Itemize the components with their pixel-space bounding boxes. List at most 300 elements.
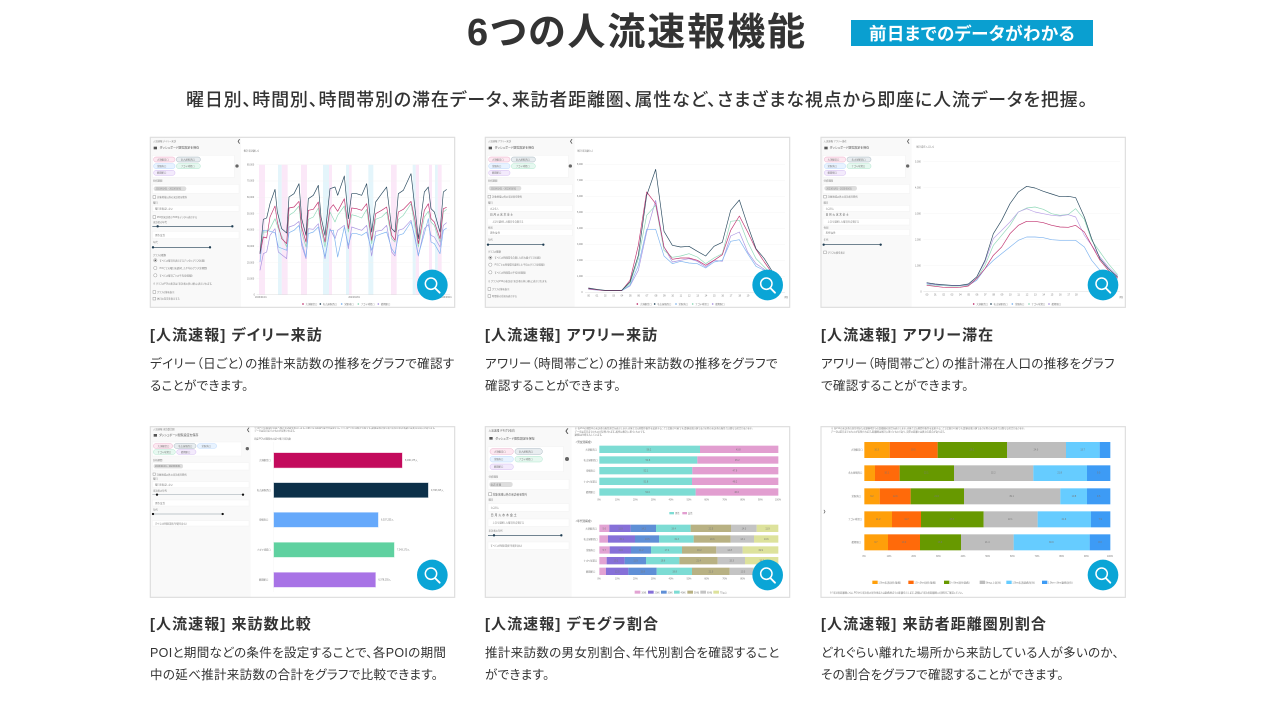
description: hourly visits xyxy=(485,357,778,393)
chart: gender stacked bars: 70% xyxy=(722,500,727,502)
chart: hourly visits line chart: 5,000 xyxy=(577,212,584,214)
chart: hourly visits line chart: 6,000 xyxy=(577,196,584,198)
sidebar: filter settings: 栄駅南口 xyxy=(202,444,212,448)
icon: magnifier xyxy=(1088,270,1118,300)
chart: hourly stay line chart: 17 xyxy=(1067,295,1071,297)
heading: hourly visits: [人流速報] アワリー来訪 xyxy=(485,327,658,344)
chart: age stacked bars: 10.1 xyxy=(614,561,619,563)
description: demographics: ができます。 xyxy=(485,668,550,682)
chart: age stacked bars: 15.3 xyxy=(729,561,735,563)
sidebar: filter settings: ❮ xyxy=(906,138,910,144)
description: visit comparison xyxy=(150,646,446,682)
chart: hourly visits line chart: 07 xyxy=(646,295,649,297)
chart: age stacked bars: 19.2 xyxy=(697,550,702,552)
sidebar: filter settings: ※ グラフのPOIの表記は「来訪者の多い順」に表示されます。 xyxy=(153,282,212,286)
chart: hourly visits line chart: 19 xyxy=(747,295,750,297)
sidebar: filter settings: 大須観音口 xyxy=(492,157,504,161)
chart: gender stacked bars: 80% xyxy=(740,500,745,502)
chart: hourly stay line chart: 01 xyxy=(934,295,937,297)
chart: horizontal bar comparison: ナゴヤ球場口 xyxy=(257,548,271,552)
chart: gender stacked bars: <男女別構成> xyxy=(576,440,592,444)
chart: hourly visits line chart: 4,000 xyxy=(577,228,584,230)
chart: hourly stay line chart: 5,000 xyxy=(915,161,922,163)
chart: horizontal bar comparison xyxy=(254,426,444,592)
chart: distance stacked bars: 60% xyxy=(1010,556,1015,558)
sidebar: filter settings: 人流速報 アワリー来訪 xyxy=(488,139,512,143)
chart: gender stacked bars: 男性 xyxy=(675,511,680,515)
chart: gender stacked bars: 10% xyxy=(615,500,620,502)
sidebar: filter settings: POIごとの曜日を選択した平均のグラフ(全期間) xyxy=(160,266,207,270)
chart: hourly stay line chart: 大須観音口 xyxy=(976,302,989,306)
sidebar: filter settings: 人流速報 デモグラ割合 xyxy=(489,429,515,433)
chart: gender stacked bars: 56.2 xyxy=(647,449,652,451)
chart: hourly stay line chart: 13 xyxy=(1034,295,1037,297)
sidebar: filter settings: 2023/01/01 - 2023/03/31 xyxy=(155,466,181,468)
chart: hourly stay line chart: 推計滞在人口(人) xyxy=(916,145,934,149)
heading: hourly stay: [人流速報] アワリー滞在 xyxy=(821,327,994,344)
panel: daily visits screenshot xyxy=(150,136,456,308)
sidebar: filter settings: ❮ xyxy=(565,429,569,435)
chart: hourly stay line chart: 栄駅南口 xyxy=(1015,302,1025,306)
chart: distance stacked bars: 39.1 xyxy=(1009,496,1015,498)
chart: gender stacked bars: 51.8 xyxy=(644,481,649,483)
sidebar: filter settings xyxy=(151,138,241,307)
sidebar: filter settings: 年代 xyxy=(153,507,158,511)
chart: horizontal bar comparison: 8,036,175人 xyxy=(405,459,418,462)
chart: distance stacked bars: 9.7 xyxy=(874,542,878,544)
chart: hourly visits line chart: 栄駅南口 xyxy=(679,302,689,306)
chart: daily line chart: ナゴヤ球場口 xyxy=(361,302,375,306)
badge: data through previous day xyxy=(851,20,1093,46)
chart: distance stacked bars: 1.5km〜3km(勤務/居住) xyxy=(1048,580,1073,584)
sidebar: filter settings: ナゴヤ球場口 xyxy=(516,164,530,168)
chart: age stacked bars: 18.6 xyxy=(661,561,666,563)
chart: hourly visits line chart: 0 xyxy=(581,292,583,294)
icon: magnifier xyxy=(417,560,448,590)
sidebar: filter settings: 鶴舞駅口 xyxy=(492,171,502,175)
chart: distance stacked bars: 28.2 xyxy=(970,450,975,452)
chart: hourly stay line chart: 3,000 xyxy=(915,213,922,215)
sidebar: filter settings: 名古屋駅西口 xyxy=(852,157,866,161)
chart: age stacked bars: 11.9 xyxy=(618,550,623,552)
chart: age stacked bars: 5.6 xyxy=(603,528,607,530)
description: hourly stay: アワリー（時間帯ごと）の推計滞在人口の推移をグラフ xyxy=(821,357,1115,371)
chart: age stacked bars: 13.3 xyxy=(741,571,746,573)
sidebar: filter settings: 鶴舞駅口 xyxy=(828,171,838,175)
chart: distance stacked bars: 9.5 xyxy=(1097,473,1101,475)
chart: horizontal bar comparison: 6,537,255人 xyxy=(381,519,394,522)
chart: age stacked bars: 20% xyxy=(633,578,638,580)
sidebar: filter settings: 鶴舞駅口 xyxy=(181,450,191,454)
chart: age stacked bars: 鶴舞駅口 xyxy=(586,569,596,573)
chart: hourly visits line chart: 鶴舞駅口 xyxy=(715,302,725,306)
chart: hourly stay line chart: 0 xyxy=(920,291,922,293)
sidebar: filter settings: 人流速報 来訪数比較 xyxy=(153,427,175,431)
sidebar: filter settings: グラフの値を表示 xyxy=(157,290,175,294)
chart: age stacked bars: 21.4 xyxy=(696,561,702,563)
chart: age stacked bars: 19.9 xyxy=(758,550,764,552)
sidebar: filter settings: ❮ xyxy=(246,427,250,433)
chart: hourly visits line chart: 推計来訪数(人) xyxy=(577,148,593,152)
chart: age stacked bars: 11.9 xyxy=(633,561,638,563)
chart: age stacked bars: 19.4 xyxy=(671,528,677,530)
sidebar: filter settings: 男性/女性 xyxy=(490,230,501,234)
sidebar: filter settings: ダッシュボード閲覧設定を保存 xyxy=(495,435,535,440)
chart: daily line chart: 40,000 xyxy=(247,230,255,232)
chart: distance stacked bars: 70% xyxy=(1035,556,1039,558)
chart: distance stacked bars: 9.5 xyxy=(1097,496,1101,498)
chart: distance stacked bars: 0% xyxy=(862,556,866,558)
chart: gender stacked bars: 30% xyxy=(651,500,656,502)
sidebar: filter settings: 栄駅南口 xyxy=(828,164,838,168)
sidebar: filter settings: ※ グラフのPOIの表記は「来訪者の多い順」に表示されます。 xyxy=(488,279,547,283)
panel: visitor distance screenshot xyxy=(820,426,1126,598)
chart: daily line chart: 2023/02/01 xyxy=(348,297,361,299)
chart: age stacked bars: 10% xyxy=(615,578,620,580)
chart: distance stacked bars: 22.1 xyxy=(1008,519,1013,521)
icon: magnifier xyxy=(752,270,783,300)
description: daily visits: デイリー（日ごと）の推計来訪数の推移をグラフで確認す xyxy=(150,357,454,371)
chart: hourly stay line chart: 1,000 xyxy=(915,265,922,267)
chart: distance stacked bars: 1.5〜3km(居住/勤務) xyxy=(914,580,936,584)
chart: gender stacked bars: 46.0 xyxy=(734,492,740,494)
chart: distance stacked bars: 21.4 xyxy=(985,542,990,544)
chart: age stacked bars: 80% xyxy=(740,578,745,580)
sidebar: filter settings: ナゴヤ球場口 xyxy=(519,457,533,461)
chart: distance stacked bars: ナゴヤ球場口 xyxy=(848,517,863,521)
chart: distance stacked bars: ※ 各POIの来訪者の居住地または勤務地からの距離圏の割合を表示します。対象となる期間や条件を変更することで比較が可能です。数値は推計値であり実際の来訪者とは異なる場合があります。 xyxy=(831,426,1025,430)
chart: daily line chart: 20,000 xyxy=(247,262,255,264)
sidebar: filter settings: 栄駅南口 xyxy=(492,164,502,168)
sidebar: filter settings: 人流速報 アワリー滞在 xyxy=(824,139,847,143)
description: hourly visits: 確認することができます。 xyxy=(485,379,621,393)
chart: gender stacked bars: 43.8 xyxy=(736,449,741,451)
chart: distance stacked bars: 8.3 xyxy=(1098,542,1102,544)
chart: distance stacked bars: 30.9 xyxy=(1049,542,1054,544)
chart: hourly visits line chart: 1,000 xyxy=(577,276,584,278)
chart: horizontal bar comparison: 名古屋駅西口 xyxy=(257,488,272,492)
chart: gender stacked bars: データは前日までのものが反映されます。属性は推計に基づくものです。 xyxy=(575,429,645,433)
chart: hourly visits line chart: 02 xyxy=(604,295,607,297)
chart: age stacked bars: 18.7 xyxy=(759,561,765,563)
sidebar: filter settings: 来訪者の年代 xyxy=(153,220,168,224)
chart: age stacked bars: 5.7 xyxy=(603,550,607,552)
chart: horizontal bar comparison: 栄駅南口 xyxy=(259,518,269,522)
sidebar: filter settings: すべての曜日ごとの平均(全期間) xyxy=(160,273,193,277)
sidebar: filter settings: 上記で選択した曜日を合算する xyxy=(828,219,859,223)
panel: hourly stay screenshot xyxy=(820,136,1126,308)
sidebar: filter settings: 対象地域以外の来訪者を除外 xyxy=(492,195,523,199)
chart: age stacked bars: 70% xyxy=(722,578,727,580)
chart: distance stacked bars: データは前日までのものが反映されます。距離圏は推計に基づくものであり、実際の距離とは異なる場合があります。 xyxy=(831,430,945,434)
chart: age stacked bars: 11.9 xyxy=(618,528,623,530)
sidebar: filter settings: 名古屋駅西口 xyxy=(181,157,196,161)
sidebar: filter settings: ❮ xyxy=(237,138,241,144)
chart: gender stacked bars: 数値は四捨五入しています。 xyxy=(575,433,602,437)
description: hourly stay xyxy=(821,357,1115,393)
sidebar: filter settings: 鶴舞駅口 xyxy=(494,465,504,469)
sidebar: filter settings: 人流速報 デイリー来訪 xyxy=(153,139,177,143)
chart: hourly visits line chart: 7,000 xyxy=(577,180,584,182)
chart: age stacked bars: 22.5 xyxy=(709,528,714,530)
chart: distance stacked bars: 11.7 xyxy=(904,519,909,521)
chart: age stacked bars: 50% xyxy=(687,578,691,580)
chart: distance stacked bars: 20% xyxy=(911,556,916,558)
chart: hourly stay line chart: ナゴヤ球場口 xyxy=(1032,302,1046,306)
chart: distance stacked bars: 3〜5km(居住/勤務) xyxy=(950,580,970,584)
sidebar: filter settings: 曜日を指定しない xyxy=(155,483,174,487)
chart: age stacked bars: 70以上 xyxy=(720,590,728,594)
chart: hourly visits line chart: 00 xyxy=(587,295,591,297)
chart: gender stacked bars: 54.0 xyxy=(645,492,651,494)
panel: hourly visits screenshot xyxy=(484,136,790,308)
chart: hourly visits line chart: 09 xyxy=(663,295,666,297)
chart: horizontal bar comparison: 指定POIの期間中の延べ推計来訪数 xyxy=(254,436,291,440)
sidebar: filter settings: グラフの種類 xyxy=(488,250,502,254)
chart: horizontal bar comparison: 9,708,315人 xyxy=(431,489,444,492)
sidebar: filter settings: 分析期間 xyxy=(153,458,163,462)
chart: hourly visits line chart: 16 xyxy=(721,295,725,297)
sidebar: filter settings: すべての時間(深夜/早朝を含む) xyxy=(155,521,187,525)
sidebar: filter settings: 曜日 xyxy=(488,200,493,204)
sidebar: filter settings: 栄駅南口 xyxy=(494,457,504,461)
chart: age stacked bars: 60代 xyxy=(707,590,713,594)
chart: hourly visits line chart: (時) xyxy=(784,295,788,299)
sidebar: filter settings: 大須観音口 xyxy=(157,157,169,161)
sidebar: filter settings xyxy=(486,138,575,307)
chart: distance stacked bars: 栄駅南口 xyxy=(852,494,862,498)
sidebar: filter settings: 曜日を指定しない xyxy=(155,206,174,210)
sidebar: filter settings: 日 月 火 水 木 金 土 xyxy=(490,212,513,216)
sidebar: filter settings xyxy=(821,138,912,307)
chart: gender stacked bars: 大須観音口 xyxy=(585,447,598,451)
sidebar: filter settings: ダッシュボード閲覧設定を保存 xyxy=(159,432,198,437)
sidebar: filter settings: 男性/女性 xyxy=(155,501,166,505)
sidebar: filter settings: 曜日 xyxy=(824,200,828,204)
chart: hourly visits line chart: 03 xyxy=(612,295,616,297)
sidebar: filter settings: 分析期間 xyxy=(489,474,499,478)
chart: distance stacked bars: 5km以上(居住) xyxy=(986,580,1001,584)
sidebar: filter settings: 曜日 xyxy=(153,477,158,481)
sidebar: filter settings xyxy=(151,427,251,597)
chart: hourly stay line chart: 2,000 xyxy=(915,239,922,241)
subtitle: 曜日別、時間別、時間帯別の滞在データ、来訪者距離圏、属性など、さまざまな視点から即座に人流データを把握。 xyxy=(186,90,1088,110)
chart: daily line chart: 名古屋駅西口 xyxy=(323,302,338,306)
chart: age stacked bars: 21.0 xyxy=(709,571,714,573)
chart: gender stacked bars: 栄駅南口 xyxy=(586,469,596,473)
chart: distance stacked bars xyxy=(823,426,1113,595)
sidebar: filter settings: 日 月 火 水 木 金 土 xyxy=(826,212,849,216)
chart: horizontal bar comparison: 大須観音口 xyxy=(259,458,271,462)
chart: hourly visits line chart: 12 xyxy=(688,295,691,297)
sidebar: filter settings: 大須観音口 xyxy=(158,444,170,448)
chart: age stacked bars: 20.6 xyxy=(710,539,715,541)
sidebar: filter settings: 2023/01/01 - 2023/03/31 xyxy=(491,188,517,190)
sidebar: filter settings: ダッシュボード閲覧設定を保存 xyxy=(830,145,869,150)
chart: age stacked bars: <年代別構成> xyxy=(576,519,592,523)
sidebar: filter settings: 分析期間 xyxy=(824,179,834,183)
chart: hourly visits line chart xyxy=(577,148,788,306)
chart: horizontal bar comparison: ※ 各POIの期間中の延べ推計来訪数を表示します。対象となる期間や条件を変更することで、各POIの比較が可能です。数値は推計値であり実際の来訪者数とは異なる場合があります。 xyxy=(254,426,435,430)
sidebar: filter settings: ナゴヤ球場口 xyxy=(852,164,866,168)
chart: distance stacked bars: 80% xyxy=(1059,556,1064,558)
chart: distance stacked bars: 1.5km未満(勤務/居住) xyxy=(1012,580,1035,584)
chart: hourly visits line chart: 11 xyxy=(680,295,683,297)
sidebar: filter settings: 対象地域以外の来訪者を除外 xyxy=(493,492,527,496)
chart: distance stacked bars: 100% xyxy=(1107,556,1113,558)
chart: age stacked bars: 17.4 xyxy=(665,550,670,552)
chart: hourly visits line chart: 06 xyxy=(637,295,641,297)
icon: magnifier xyxy=(1088,560,1118,590)
sidebar: filter settings: グラフの値を表示 xyxy=(828,250,846,254)
chart: daily line chart: 推計来訪数(人) xyxy=(244,148,259,152)
chart: distance stacked bars: 22.1 xyxy=(924,473,929,475)
sidebar: filter settings: カスタム xyxy=(826,206,835,210)
chart: age stacked bars: 10代 xyxy=(641,590,647,594)
description: hourly stay: で確認することができます。 xyxy=(821,379,969,393)
chart: age stacked bars: 11.2 xyxy=(639,550,644,552)
chart: gender stacked bars: 20% xyxy=(633,500,638,502)
chart: gender stacked bars: 0% xyxy=(597,500,601,502)
chart: hourly visits line chart: 04 xyxy=(621,295,624,297)
chart: daily line chart: 80,000 xyxy=(247,164,255,166)
chart: hourly stay line chart: 03 xyxy=(951,295,954,297)
sidebar: filter settings: ❮ xyxy=(569,138,573,144)
chart: age stacked bars: 30代 xyxy=(668,590,673,594)
sidebar: filter settings: 分析期間 xyxy=(153,179,163,183)
chart: hourly stay line chart: 08 xyxy=(992,295,996,297)
chart: age stacked bars: 15.1 xyxy=(619,539,625,541)
sidebar: filter settings: 対象地域以外の来訪者を除外 xyxy=(157,472,187,476)
sidebar: filter settings: 2023/01/01 - 2023/03/31 xyxy=(156,189,182,191)
sidebar: filter settings: 来訪者の年代 xyxy=(153,489,168,493)
chart: distance stacked bars: 16.6 xyxy=(938,542,943,544)
chart: daily line chart: 2023/01/01 xyxy=(255,297,267,299)
sidebar: filter settings: 休日の背景を表示する xyxy=(157,297,180,301)
chart: gender stacked bars: 47.9 xyxy=(733,471,738,473)
chart: daily line chart: 栄駅南口 xyxy=(344,302,354,306)
chart: horizontal bar comparison: 6,378,255人 xyxy=(378,579,392,582)
chart: gender stacked bars: 40% xyxy=(669,500,673,502)
chart: daily line chart: 50,000 xyxy=(247,213,255,215)
chart: gender stacked bars: ナゴヤ球場口 xyxy=(584,479,598,483)
chart: hourly visits line chart: ナゴヤ球場口 xyxy=(695,302,710,306)
chart: daily line chart: 鶴舞駅口 xyxy=(381,302,391,306)
chart: age stacked bars: 20代 xyxy=(655,590,660,594)
sidebar: filter settings: 鶴舞駅口 xyxy=(157,171,167,175)
sidebar: filter settings: グラフの種類 xyxy=(153,253,167,257)
chart: hourly stay line chart: 18 xyxy=(1075,295,1078,297)
chart: gender stacked bars: 100% xyxy=(775,500,781,502)
chart: distance stacked bars: 6.2 xyxy=(870,496,874,498)
chart: distance stacked bars: 7.9 xyxy=(1099,519,1103,521)
chart: distance stacked bars: 50% xyxy=(985,556,990,558)
chart: hourly stay line chart: 鶴舞駅口 xyxy=(1052,302,1062,306)
sidebar: filter settings: 栄駅南口 xyxy=(157,164,167,168)
chart: distance stacked bars: 鶴舞駅口 xyxy=(852,540,862,544)
sidebar: filter settings: 名古屋駅西口 xyxy=(516,157,531,161)
chart: age stacked bars: 13.5 xyxy=(645,539,650,541)
description: demographics: 推計来訪数の男女別割合、年代別割合を確認すること xyxy=(485,646,780,660)
chart: age stacked bars: 13.1 xyxy=(740,539,746,541)
sidebar: filter settings: 時間帯の背景を表示する xyxy=(492,294,517,298)
chart: age stacked bars xyxy=(576,519,778,594)
chart: hourly stay line chart: 16 xyxy=(1059,295,1062,297)
sidebar: filter settings: 名古屋駅西口 xyxy=(178,444,193,448)
chart: gender stacked bars: 52.1 xyxy=(644,471,649,473)
chart: age stacked bars: 60% xyxy=(704,578,709,580)
description: demographics xyxy=(485,646,780,682)
chart: hourly stay line chart: 14 xyxy=(1042,295,1046,297)
chart: gender stacked bars: 50% xyxy=(687,500,691,502)
chart: hourly stay line chart: 02 xyxy=(942,295,946,297)
chart: hourly visits line chart: 10 xyxy=(671,295,675,297)
sidebar: filter settings: 性別 xyxy=(488,226,493,230)
chart: horizontal bar comparison: データは前日までのものが反映されます。 xyxy=(254,428,295,432)
chart: age stacked bars: ナゴヤ球場口 xyxy=(584,559,598,563)
sidebar: filter settings: 対象地域以外の来訪者を除外 xyxy=(828,195,858,199)
chart: gender stacked bars: 60% xyxy=(704,500,709,502)
chart: hourly stay line chart: 12 xyxy=(1026,295,1029,297)
chart: distance stacked bars: 名古屋駅西口 xyxy=(848,471,863,475)
chart: daily line chart: 2023/03/01 xyxy=(440,297,452,299)
chart: gender stacked bars: 45.2 xyxy=(735,460,740,462)
chart: age stacked bars: 19.8 xyxy=(672,571,678,573)
description: visit comparison: 中の延べ推計来訪数の合計をグラフで比較できます。 xyxy=(150,668,438,682)
sidebar: filter settings: 分析期間 xyxy=(488,179,498,183)
chart: age stacked bars: 14.8 xyxy=(727,550,733,552)
sidebar: filter settings: 大須観音口 xyxy=(494,449,506,453)
chart: hourly visits line chart: 名古屋駅西口 xyxy=(657,302,672,306)
sidebar: filter settings: 上記で選択した曜日を合算する xyxy=(493,521,524,525)
chart: gender stacked bars: 鶴舞駅口 xyxy=(586,490,596,494)
chart: age stacked bars: 14.3 xyxy=(742,528,747,530)
chart: distance stacked bars: 21.6 xyxy=(934,496,940,498)
chart: daily line chart: 0 xyxy=(254,294,256,296)
heading: demographics: [人流速報] デモグラ割合 xyxy=(485,616,659,633)
chart: age stacked bars: 30% xyxy=(651,578,656,580)
badge: data through previous day: 前日までのデータがわかる xyxy=(869,24,1075,44)
sidebar: filter settings: すべての時間(深夜/早朝を含む) xyxy=(491,544,522,548)
chart: distance stacked bars: 1.5km未満(居住/勤務) xyxy=(878,580,901,584)
chart: hourly stay line chart: 06 xyxy=(976,295,979,297)
sidebar: filter settings: グラフの値を表示 xyxy=(492,287,510,291)
chart: age stacked bars: 11.9 xyxy=(765,528,770,530)
chart: distance stacked bars: 30% xyxy=(936,556,941,558)
chart: distance stacked bars: 13.0 xyxy=(902,542,907,544)
chart: daily line chart xyxy=(244,148,452,306)
chart: age stacked bars: 14.2 xyxy=(641,528,647,530)
chart: horizontal bar comparison: 7,543,170人 xyxy=(397,549,410,552)
chart: hourly stay line chart: 07 xyxy=(984,295,987,297)
panel: visit comparison screenshot xyxy=(150,426,456,598)
sidebar: filter settings: 直近1年間 xyxy=(491,483,502,487)
chart: age stacked bars: 19.3 xyxy=(674,539,680,541)
chart: distance stacked bars: 21.8 xyxy=(1057,473,1063,475)
chart: age stacked bars: 40代 xyxy=(681,590,686,594)
chart: age stacked bars: 50代 xyxy=(694,590,700,594)
sidebar: filter settings: ナゴヤ球場口 xyxy=(181,164,195,168)
sidebar: filter settings: 男性/女性 xyxy=(826,230,836,234)
chart: hourly stay line chart: 00 xyxy=(926,295,929,297)
sidebar: filter settings: 曜日 xyxy=(153,200,158,204)
icon: magnifier xyxy=(417,270,448,300)
chart: hourly visits line chart: 大須観音口 xyxy=(640,302,652,306)
chart: distance stacked bars: ※「来訪者距離圏」とは、POIから来訪者の居住地または勤務地までの距離を示します。詳細は「来訪者距離圏」の説明をご確認ください。 xyxy=(830,591,963,595)
chart: distance stacked bars: 大須観音口 xyxy=(851,448,863,452)
chart: age stacked bars: 大須観音口 xyxy=(585,526,598,530)
chart: gender stacked bars: 名古屋駅西口 xyxy=(584,458,598,462)
